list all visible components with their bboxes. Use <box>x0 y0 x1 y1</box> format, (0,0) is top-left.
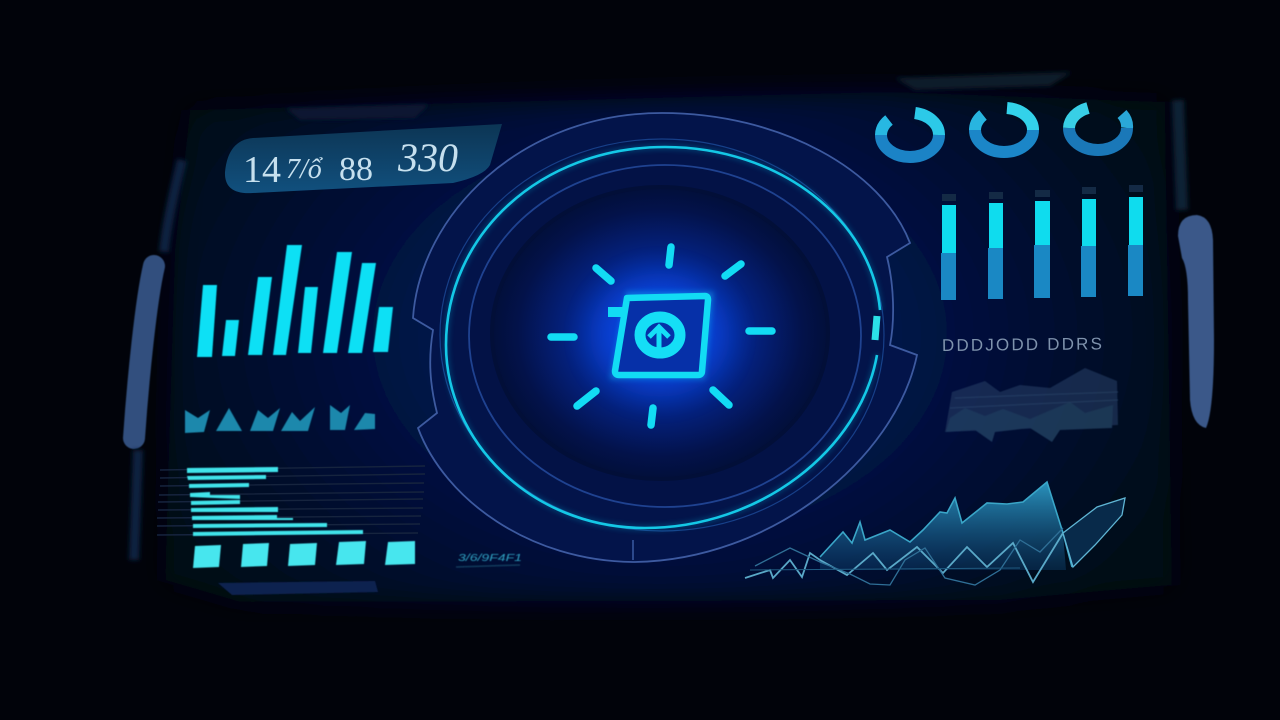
bottom tick <box>632 540 634 560</box>
banner text: 7/ổ <box>286 154 323 185</box>
outer notched frame <box>413 113 917 562</box>
right wedge <box>1063 498 1125 567</box>
grid lines <box>157 466 425 535</box>
donut 1 <box>881 113 939 157</box>
bar lower segments <box>941 245 1143 300</box>
icon glow <box>615 296 709 375</box>
cyan ring glow <box>446 147 880 528</box>
dial <box>640 317 680 353</box>
cyan ring <box>446 147 880 528</box>
baseline <box>750 568 1020 570</box>
cyan ring tick <box>875 316 877 340</box>
second ring <box>440 139 884 531</box>
central gauge <box>413 113 917 562</box>
upper left tab <box>285 104 430 120</box>
donut gauges <box>881 108 1127 157</box>
line series <box>745 533 1063 582</box>
rays <box>551 247 772 425</box>
banner text: 88 <box>339 151 373 188</box>
donut 2 <box>975 108 1033 152</box>
right side rail <box>1178 100 1182 210</box>
bottom tab <box>218 581 378 595</box>
bar caps <box>942 185 1143 201</box>
faint series <box>755 528 1063 585</box>
banner text: 330 <box>397 135 458 180</box>
line chart with area <box>745 482 1125 585</box>
bars <box>187 467 363 536</box>
small footer label: 3/6/9F4F1 <box>458 553 522 564</box>
triangle pattern row <box>185 405 375 433</box>
icon: sunburst with framed dial <box>551 247 772 425</box>
banner text: 14 <box>243 149 281 191</box>
inner dark disc <box>492 187 828 479</box>
frame stub <box>608 307 627 317</box>
bar upper segments <box>942 197 1143 253</box>
area outline <box>820 482 1072 567</box>
horizontal bar chart <box>157 466 425 536</box>
small footer label <box>456 553 522 567</box>
right side handle <box>1178 215 1214 428</box>
value banner <box>225 124 502 193</box>
caption text: DDDJODD DDRS <box>942 334 1102 355</box>
central glow <box>590 273 730 397</box>
left side handle <box>134 266 154 438</box>
left side rail <box>134 160 182 560</box>
framed square <box>615 296 708 375</box>
bar chart: vertical cyan bars <box>197 245 393 357</box>
level bars <box>941 185 1143 300</box>
mid ring <box>469 165 861 507</box>
donut 3 <box>1069 108 1127 150</box>
filled area <box>820 482 1066 570</box>
muted area chart <box>945 368 1118 442</box>
top tab <box>895 72 1072 90</box>
square legend swatches <box>193 541 415 568</box>
dial arrow <box>649 327 669 349</box>
panel: dashboard background <box>165 92 1172 602</box>
